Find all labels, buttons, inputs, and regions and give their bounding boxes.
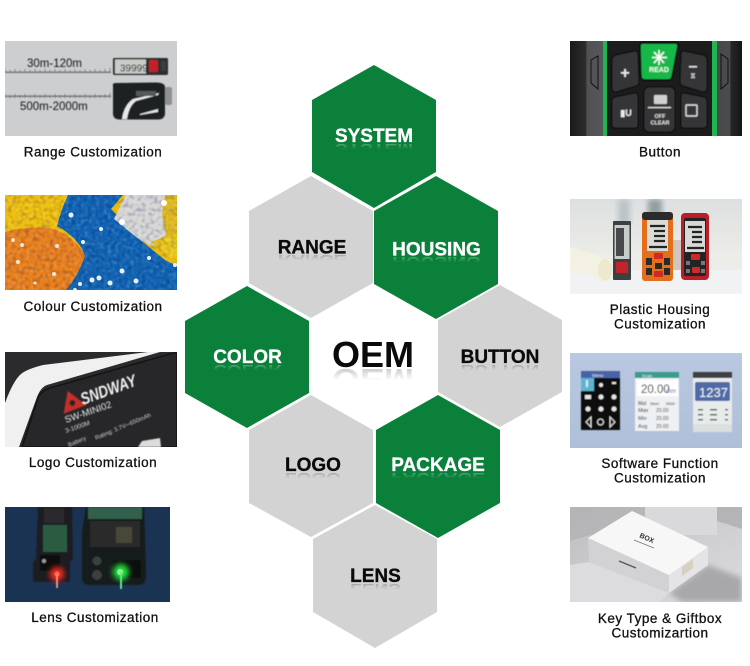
panel: range customization [5, 41, 177, 160]
photo: three software screens: Avg [638, 424, 647, 430]
photo: three software screens: 20.00 [641, 384, 670, 396]
caption: plastic housing customization: Plastic Housing [610, 302, 710, 317]
photo: device label: 3-1000M [64, 420, 91, 435]
photo: range comparison: 39999 [120, 64, 148, 74]
photo: range comparison: 30m-120m [27, 58, 82, 70]
photo: three software screens: Steel [650, 401, 659, 406]
caption: software function customization: Software Function [601, 456, 719, 471]
photo: three software screens: 1237 [699, 385, 728, 400]
caption: software function customization [601, 456, 719, 486]
photo: plastic pellets [5, 195, 177, 292]
photo: three software screens [570, 353, 742, 448]
hexagon: button: BUTTON [461, 362, 539, 378]
hexagon: color [185, 286, 309, 428]
photo: device label: Rating: 3.7V⎓650mAh [94, 413, 152, 442]
photo: three software screens: 20.00 [656, 408, 669, 414]
caption: key type and giftbox customization: Key Type & Giftbox [598, 611, 722, 626]
hexagon: lens [313, 505, 437, 648]
photo: three software screens: Menu [592, 373, 604, 378]
panel: software function customization [570, 353, 742, 486]
caption: lens customization: Lens Customization [31, 610, 159, 625]
photo: three software screens: 5920 [666, 401, 676, 406]
center label: OEM: OEM [332, 334, 414, 375]
hexagon: system: SYSTEM [335, 141, 413, 157]
hexagon: lens: LENS [350, 566, 401, 587]
hexagon: housing: HOUSING [392, 240, 481, 260]
panel: logo customization [5, 352, 177, 470]
hexagon: housing [374, 176, 498, 319]
hexagon: color: COLOR [213, 347, 282, 368]
photo: three software screens: mm [666, 389, 676, 395]
hexagon: system [312, 65, 436, 208]
photo: keypad: + [620, 65, 630, 82]
caption: range customization: Range Customization [24, 144, 162, 160]
hexagon: button: BUTTON [461, 347, 539, 368]
caption: logo customization: Logo Customization [29, 455, 157, 470]
hexagon diagram [185, 65, 562, 648]
panel: button [570, 41, 742, 160]
hexagon: range: RANGE [278, 252, 346, 268]
hexagon: housing: HOUSING [392, 254, 481, 270]
photo: keypad: ▮U [620, 108, 632, 118]
hexagon: package: PACKAGE [391, 470, 485, 486]
photo: range comparison: 500m-2000m [20, 101, 88, 113]
panel: key type and giftbox customization [570, 507, 742, 640]
hexagon: button [438, 285, 562, 427]
photo: three software screens: Min [638, 416, 647, 422]
photo: three software screens: 20.00 [656, 416, 669, 422]
photo: three software screens: 20.00 [656, 424, 669, 430]
panel: colour customization [5, 195, 177, 314]
photo: range comparison [5, 41, 177, 136]
hexagon: color: COLOR [213, 362, 282, 378]
caption: key type and giftbox customization: Customizartion [611, 626, 709, 640]
photo: red and green lasers [5, 507, 170, 602]
photo: keypad [570, 41, 742, 136]
caption: button: Button [639, 144, 681, 160]
caption: plastic housing customization: Customization [614, 316, 706, 332]
panel: plastic housing customization [570, 199, 742, 332]
photo: keypad: CLEAR [651, 120, 669, 126]
hexagon: logo: LOGO [285, 470, 341, 486]
photo: three housings [570, 199, 742, 294]
photo: white gift box: BOX [638, 532, 655, 545]
hexagon: package [376, 395, 500, 538]
photo: white gift box [570, 507, 742, 602]
hexagon: range [249, 176, 373, 318]
hexagon: package: PACKAGE [391, 455, 485, 476]
caption: colour customization: Colour Customization [23, 299, 163, 314]
photo: keypad: ⧖ [691, 73, 696, 80]
photo: three software screens: Scan [642, 374, 653, 378]
photo: three software screens: Mat [638, 401, 647, 407]
center label: OEM: OEM [332, 362, 414, 396]
photo: device label: SNDWAY [78, 371, 140, 409]
photo: keypad: OFF [654, 114, 666, 120]
caption: plastic housing customization [610, 302, 710, 332]
hexagon: range: RANGE [278, 238, 346, 258]
hexagon: lens: LENS [350, 581, 401, 597]
photo: device label [5, 352, 177, 449]
caption: software function customization: Customization [614, 470, 706, 486]
photo: keypad: READ [649, 67, 669, 74]
center label: OEM [332, 334, 414, 396]
hexagon: logo: LOGO [285, 455, 341, 476]
photo: device label: Battery [67, 436, 87, 449]
photo: three software screens: Max [638, 408, 649, 414]
hexagon: logo [249, 395, 373, 537]
caption: key type and giftbox customization [598, 611, 722, 640]
panel: lens customization [5, 507, 170, 625]
hexagon: system: SYSTEM [335, 126, 413, 147]
photo: device label: SW-MINI02 [63, 400, 113, 426]
